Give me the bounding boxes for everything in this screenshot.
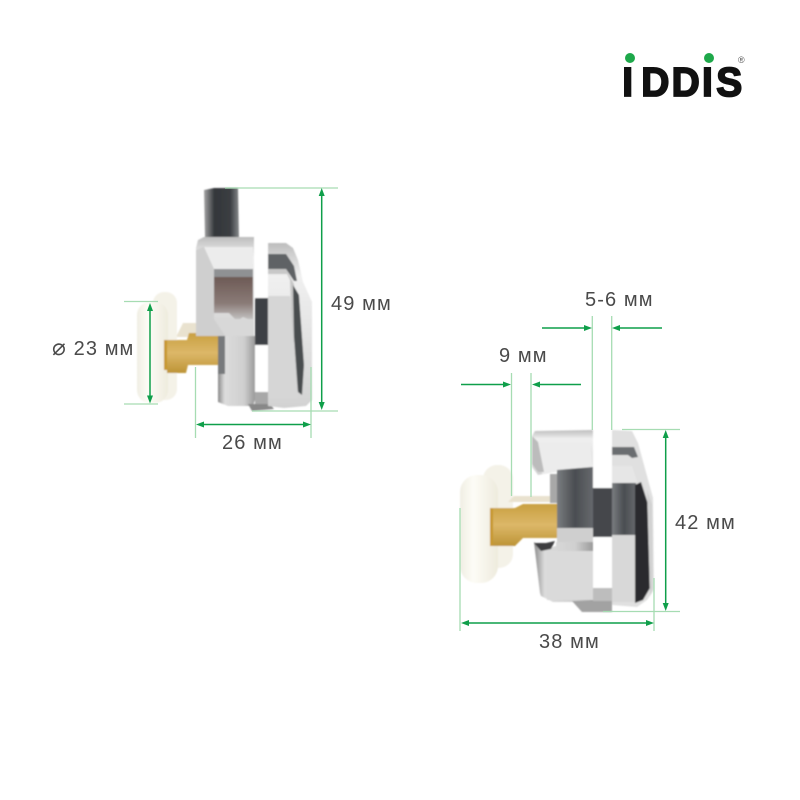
- brass axle: [490, 496, 557, 546]
- right chrome cover: [612, 430, 654, 607]
- dimension: ⌀ 23 мм wheel diameter: ⌀ 23 мм: [52, 334, 134, 360]
- adjusting post: [204, 188, 239, 238]
- brass axle: [164, 323, 218, 373]
- roller wheel: [460, 465, 513, 583]
- glass gap and spindle: [248, 241, 274, 411]
- dimension: 5-6 мм glass thickness: [542, 289, 662, 430]
- dimension: 49 мм height: [225, 188, 392, 411]
- lower chrome block: [534, 541, 593, 602]
- thread: [550, 474, 558, 503]
- left chrome body: [196, 237, 255, 406]
- product: roller, side view: [137, 188, 312, 411]
- dimension: 38 мм depth: [460, 508, 654, 653]
- dark centre section: [557, 467, 593, 545]
- right chrome cover: [268, 243, 312, 408]
- logo: IDDIS: ®: [738, 55, 745, 65]
- dimension: 38 мм depth: 38 мм: [539, 631, 600, 653]
- dimension: 42 мм height: 42 мм: [675, 512, 736, 534]
- roller wheel: [137, 292, 177, 403]
- glass gap and spindle: [572, 430, 612, 612]
- dimension: 9 мм offset: 9 мм: [499, 345, 548, 367]
- dimension: 42 мм height: [603, 430, 736, 612]
- upper chrome block: [532, 430, 593, 475]
- product: roller, three-quarter view: [460, 430, 654, 612]
- logo: IDDIS: IDDIS: [622, 60, 742, 105]
- dimension: 26 мм width: 26 мм: [222, 432, 283, 454]
- dimension: 5-6 мм glass thickness: 5-6 мм: [585, 289, 654, 311]
- dimension: 49 мм height: 49 мм: [331, 293, 392, 315]
- dimension: ⌀ 23 мм wheel diameter: [52, 302, 158, 404]
- dimension: 26 мм width: [196, 367, 311, 454]
- dimension: 9 мм offset: [461, 345, 581, 497]
